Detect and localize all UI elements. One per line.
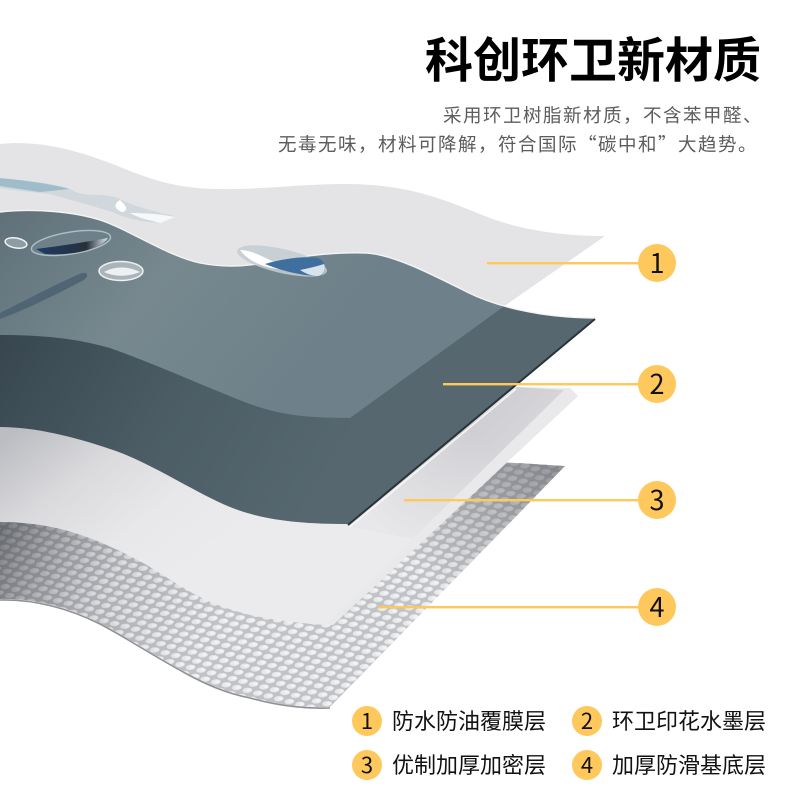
description text xyxy=(278,102,763,157)
legend item 2: 2 xyxy=(581,704,593,736)
water droplets xyxy=(0,178,330,319)
legend item 4: 4 xyxy=(581,748,593,780)
callout 4: 4 xyxy=(650,586,664,625)
title: 科创环卫新材质 xyxy=(425,21,761,91)
legend item 3: 3 xyxy=(361,748,373,780)
legend item 2: 环卫印花水墨层 xyxy=(612,704,766,736)
legend item 1: 1 xyxy=(361,704,373,736)
layer 1: clear waterproof film xyxy=(0,143,605,307)
layer 4: anti-slip dotted base xyxy=(0,462,565,708)
legend item 3: 优制加厚加密层 xyxy=(392,748,546,780)
legend item 1: 防水防油覆膜层 xyxy=(392,704,546,736)
callout 2: 2 xyxy=(650,363,664,402)
callout 2 xyxy=(443,363,676,403)
layer 2: eco printing ink xyxy=(0,210,595,527)
callout 3: 3 xyxy=(650,479,664,518)
legend item 4: 加厚防滑基底层 xyxy=(612,748,766,780)
legend xyxy=(352,704,766,780)
callout 3 xyxy=(404,479,676,519)
callout 4 xyxy=(378,586,676,626)
description text: 采用环卫树脂新材质，不含苯甲醛、 xyxy=(443,102,763,128)
callout 1 xyxy=(487,242,676,282)
layer 3: thick white density layer xyxy=(0,387,578,625)
callout 1: 1 xyxy=(650,242,664,281)
description text: 无毒无味，材料可降解，符合国际“碳中和”大趋势。 xyxy=(278,131,758,157)
